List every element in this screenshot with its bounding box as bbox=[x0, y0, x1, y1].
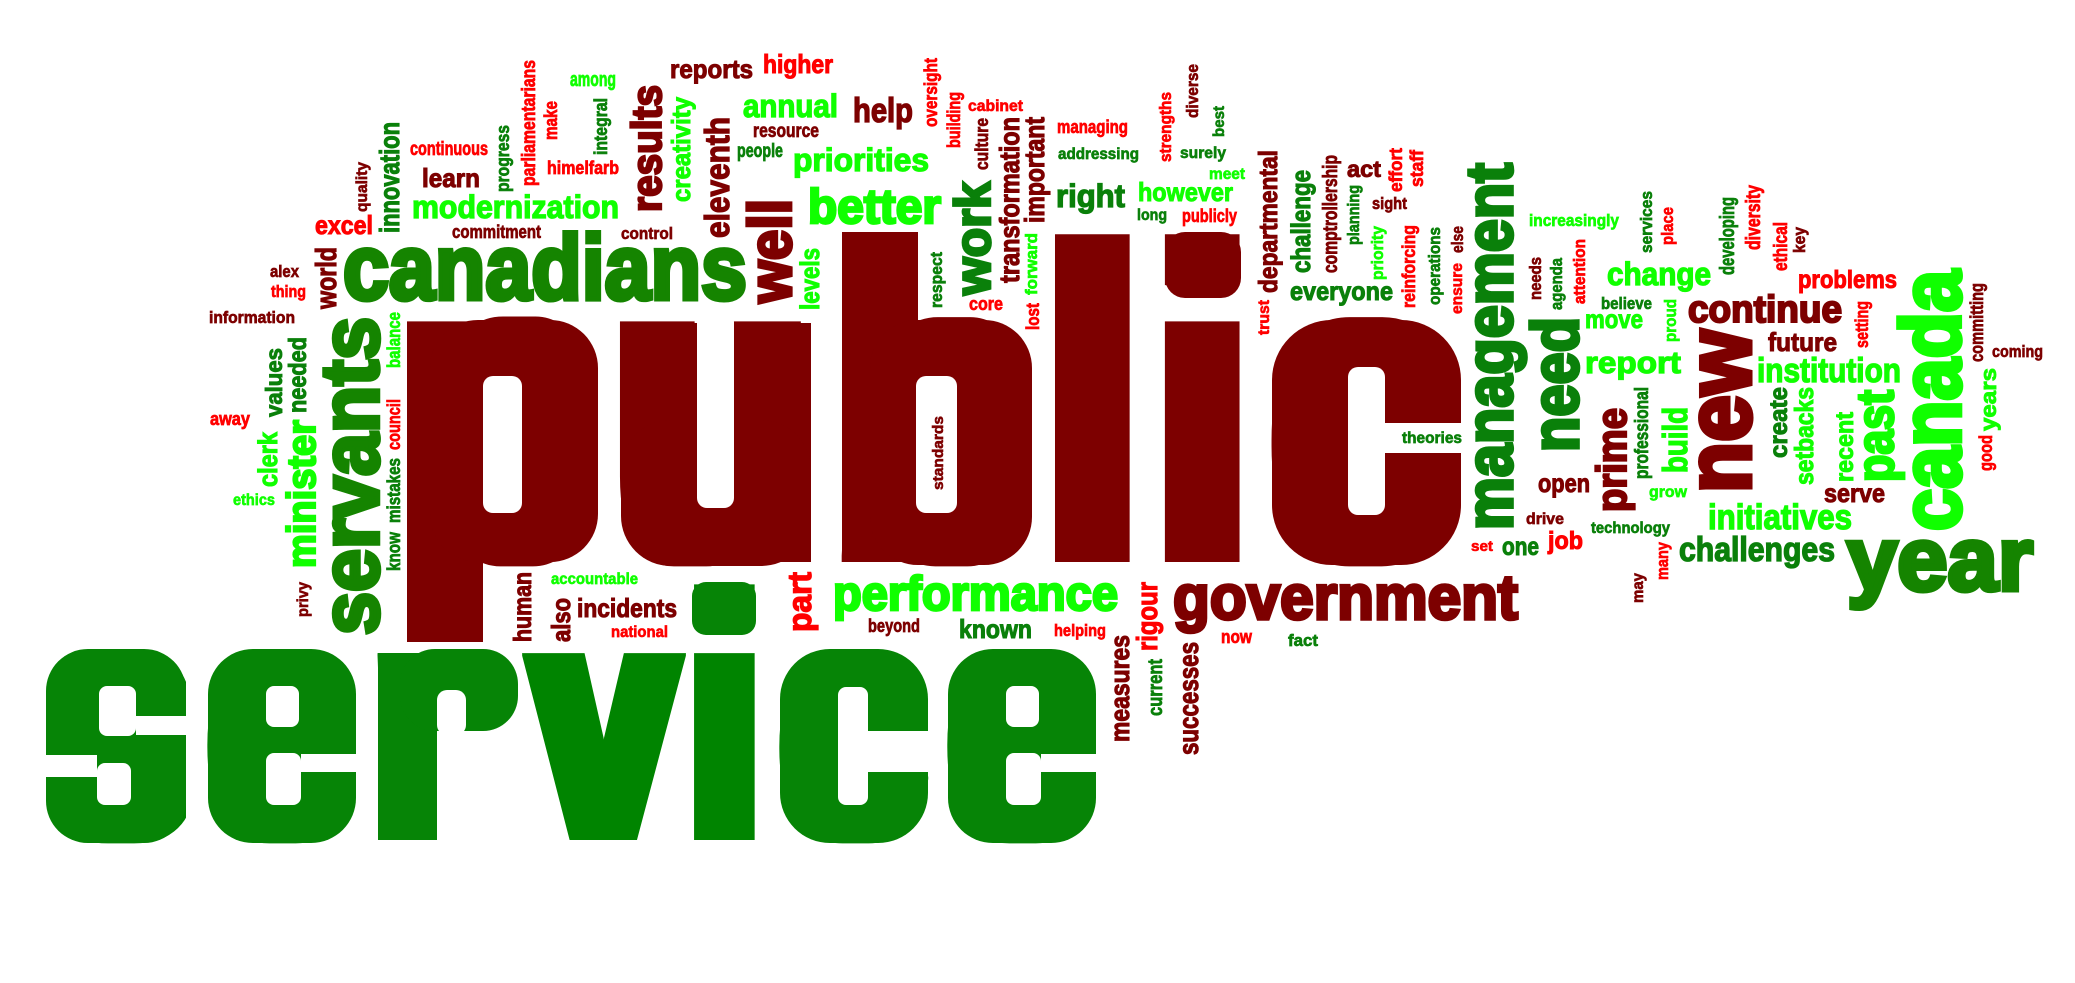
word: initiatives: initiatives bbox=[1708, 498, 1852, 537]
word: proud: proud bbox=[1661, 299, 1680, 342]
word: innovation: innovation bbox=[374, 122, 405, 233]
word: priority: priority bbox=[1368, 225, 1387, 280]
word: eleventh: eleventh bbox=[699, 117, 737, 238]
word: now: now bbox=[1221, 627, 1253, 647]
word: away: away bbox=[210, 409, 250, 429]
word: part: part bbox=[781, 572, 818, 632]
word: strengths: strengths bbox=[1156, 92, 1175, 162]
word: surely: surely bbox=[1180, 145, 1226, 162]
word: else: else bbox=[1448, 226, 1467, 253]
word: make: make bbox=[541, 101, 561, 140]
word: reports: reports bbox=[670, 54, 753, 84]
word: canada: canada bbox=[1884, 269, 1978, 531]
word: reinforcing: reinforcing bbox=[1399, 225, 1419, 308]
word: attention: attention bbox=[1570, 239, 1589, 304]
word: institution: institution bbox=[1757, 352, 1901, 390]
word: continuous: continuous bbox=[410, 139, 488, 160]
word: ethical: ethical bbox=[1771, 222, 1792, 271]
word cloud bbox=[46, 54, 2042, 844]
word: among: among bbox=[570, 69, 616, 91]
word: many: many bbox=[1653, 542, 1672, 580]
word: set: set bbox=[1471, 538, 1493, 555]
word: increasingly: increasingly bbox=[1529, 211, 1619, 230]
word: move: move bbox=[1585, 304, 1643, 334]
word: trust: trust bbox=[1256, 299, 1273, 335]
word: helping: helping bbox=[1054, 621, 1106, 640]
word: levels: levels bbox=[795, 248, 825, 310]
word: create: create bbox=[1765, 387, 1793, 458]
word: resource: resource bbox=[753, 121, 819, 142]
word: commitment: commitment bbox=[452, 222, 541, 242]
word: balance: balance bbox=[384, 312, 404, 368]
word: place: place bbox=[1658, 207, 1677, 245]
word: agenda: agenda bbox=[1547, 258, 1566, 310]
word: himelfarb: himelfarb bbox=[547, 158, 619, 178]
word: report: report bbox=[1585, 345, 1681, 380]
word: build: build bbox=[1657, 407, 1695, 473]
word: open: open bbox=[1538, 468, 1590, 498]
word: council: council bbox=[384, 399, 404, 450]
word: recent: recent bbox=[1831, 411, 1859, 482]
word: accountable: accountable bbox=[551, 571, 638, 588]
word: results: results bbox=[623, 85, 670, 212]
word: transformation: transformation bbox=[994, 117, 1025, 283]
word: meet: meet bbox=[1209, 166, 1246, 183]
word: sight: sight bbox=[1372, 194, 1407, 213]
word: continue: continue bbox=[1688, 289, 1842, 331]
word: values: values bbox=[261, 348, 287, 417]
word: known: known bbox=[959, 614, 1032, 644]
word: incidents: incidents bbox=[577, 593, 677, 623]
word: measures: measures bbox=[1105, 635, 1135, 742]
word: work: work bbox=[945, 182, 1001, 296]
word: operations: operations bbox=[1425, 227, 1444, 305]
word: learn: learn bbox=[422, 163, 480, 193]
word: alex: alex bbox=[270, 262, 299, 281]
word: better: better bbox=[808, 181, 941, 234]
word: people: people bbox=[737, 141, 783, 162]
word: mistakes: mistakes bbox=[384, 458, 404, 523]
word: change: change bbox=[1607, 256, 1711, 292]
word: respect: respect bbox=[927, 252, 946, 308]
word: coming: coming bbox=[1992, 342, 2043, 361]
word: modernization: modernization bbox=[412, 189, 619, 225]
word: needs: needs bbox=[1526, 257, 1545, 300]
word: diverse: diverse bbox=[1183, 64, 1202, 118]
word: control: control bbox=[621, 224, 673, 243]
word: canadians: canadians bbox=[343, 217, 747, 319]
word: future: future bbox=[1768, 327, 1837, 357]
word: problems: problems bbox=[1798, 266, 1897, 294]
word: act: act bbox=[1347, 156, 1381, 182]
word: developing: developing bbox=[1717, 197, 1739, 275]
word: however: however bbox=[1138, 177, 1233, 207]
word: creativity: creativity bbox=[666, 97, 696, 202]
word: culture: culture bbox=[972, 118, 992, 170]
word: priorities: priorities bbox=[793, 142, 929, 178]
word: needed: needed bbox=[284, 337, 312, 413]
word: professional: professional bbox=[1632, 387, 1653, 479]
word: progress: progress bbox=[493, 125, 513, 192]
word: current: current bbox=[1145, 659, 1167, 716]
word: job: job bbox=[1547, 527, 1583, 555]
word: lost: lost bbox=[1023, 303, 1043, 330]
word: successes: successes bbox=[1173, 642, 1204, 755]
word: drive: drive bbox=[1526, 511, 1564, 528]
word: one: one bbox=[1502, 533, 1539, 561]
word: ensure: ensure bbox=[1449, 263, 1466, 314]
word: parliamentarians: parliamentarians bbox=[519, 60, 540, 186]
word: core: core bbox=[969, 294, 1003, 314]
word: ethics: ethics bbox=[233, 492, 275, 509]
word: staff: staff bbox=[1407, 149, 1427, 187]
word: quality: quality bbox=[354, 162, 371, 212]
word: national: national bbox=[611, 624, 668, 641]
word: managing: managing bbox=[1057, 117, 1128, 137]
word: challenge: challenge bbox=[1286, 170, 1316, 273]
word: rigour: rigour bbox=[1132, 582, 1164, 651]
word: help: help bbox=[853, 92, 913, 130]
word: cabinet: cabinet bbox=[968, 98, 1024, 115]
word: management: management bbox=[1452, 163, 1526, 530]
word: servants: servants bbox=[305, 317, 396, 635]
word: beyond: beyond bbox=[868, 616, 920, 636]
word: higher: higher bbox=[763, 49, 833, 79]
word: integral: integral bbox=[591, 98, 611, 155]
word: committing: committing bbox=[1967, 283, 1987, 362]
word: setbacks: setbacks bbox=[1789, 387, 1819, 485]
word: best: best bbox=[1211, 105, 1228, 137]
word: prime: prime bbox=[1588, 408, 1635, 512]
word: years: years bbox=[1976, 368, 2001, 431]
word: clerk: clerk bbox=[253, 431, 283, 487]
word: diversity: diversity bbox=[1743, 184, 1765, 250]
word: right: right bbox=[1056, 178, 1125, 214]
word: planning: planning bbox=[1344, 185, 1363, 245]
word: building: building bbox=[944, 92, 964, 148]
word: standards: standards bbox=[930, 416, 947, 490]
word: key: key bbox=[1790, 227, 1809, 253]
word: minister: minister bbox=[280, 420, 324, 568]
word: world: world bbox=[311, 247, 343, 310]
word: grow: grow bbox=[1649, 484, 1688, 501]
word: human: human bbox=[509, 572, 537, 642]
word: also: also bbox=[546, 598, 576, 642]
word: forward: forward bbox=[1022, 233, 1041, 295]
word: long: long bbox=[1137, 207, 1167, 224]
word: service: service bbox=[51, 522, 1091, 914]
word: departmental: departmental bbox=[1253, 150, 1283, 293]
word: oversight: oversight bbox=[921, 58, 941, 127]
word: serve: serve bbox=[1824, 478, 1885, 508]
word: setting: setting bbox=[1852, 301, 1872, 348]
word: everyone: everyone bbox=[1290, 276, 1393, 306]
word: believe: believe bbox=[1601, 294, 1652, 313]
word: fact: fact bbox=[1288, 631, 1318, 650]
word: challenges: challenges bbox=[1679, 531, 1835, 569]
word: services: services bbox=[1637, 191, 1656, 253]
word: year: year bbox=[1847, 510, 2033, 610]
word: know: know bbox=[384, 531, 404, 571]
word: new: new bbox=[1668, 330, 1770, 493]
word: privy: privy bbox=[295, 582, 312, 617]
word: annual: annual bbox=[743, 88, 838, 124]
word: well: well bbox=[737, 199, 804, 304]
word: important: important bbox=[1019, 117, 1050, 223]
word: excel: excel bbox=[315, 210, 373, 240]
word: good: good bbox=[1976, 435, 1996, 471]
word: publicly: publicly bbox=[1182, 206, 1237, 226]
word: performance: performance bbox=[833, 568, 1118, 621]
word: technology: technology bbox=[1591, 520, 1670, 537]
word: thing: thing bbox=[271, 282, 306, 301]
word: addressing: addressing bbox=[1058, 146, 1139, 163]
word: government: government bbox=[1173, 563, 1518, 633]
word: may: may bbox=[1630, 573, 1647, 603]
word: theories: theories bbox=[1402, 430, 1462, 447]
word: need: need bbox=[1518, 317, 1592, 452]
word: comptrollership: comptrollership bbox=[1320, 155, 1342, 273]
word: information: information bbox=[209, 308, 295, 327]
word: past: past bbox=[1847, 390, 1905, 482]
word: effort: effort bbox=[1386, 148, 1406, 192]
word: public: public bbox=[402, 158, 1448, 656]
